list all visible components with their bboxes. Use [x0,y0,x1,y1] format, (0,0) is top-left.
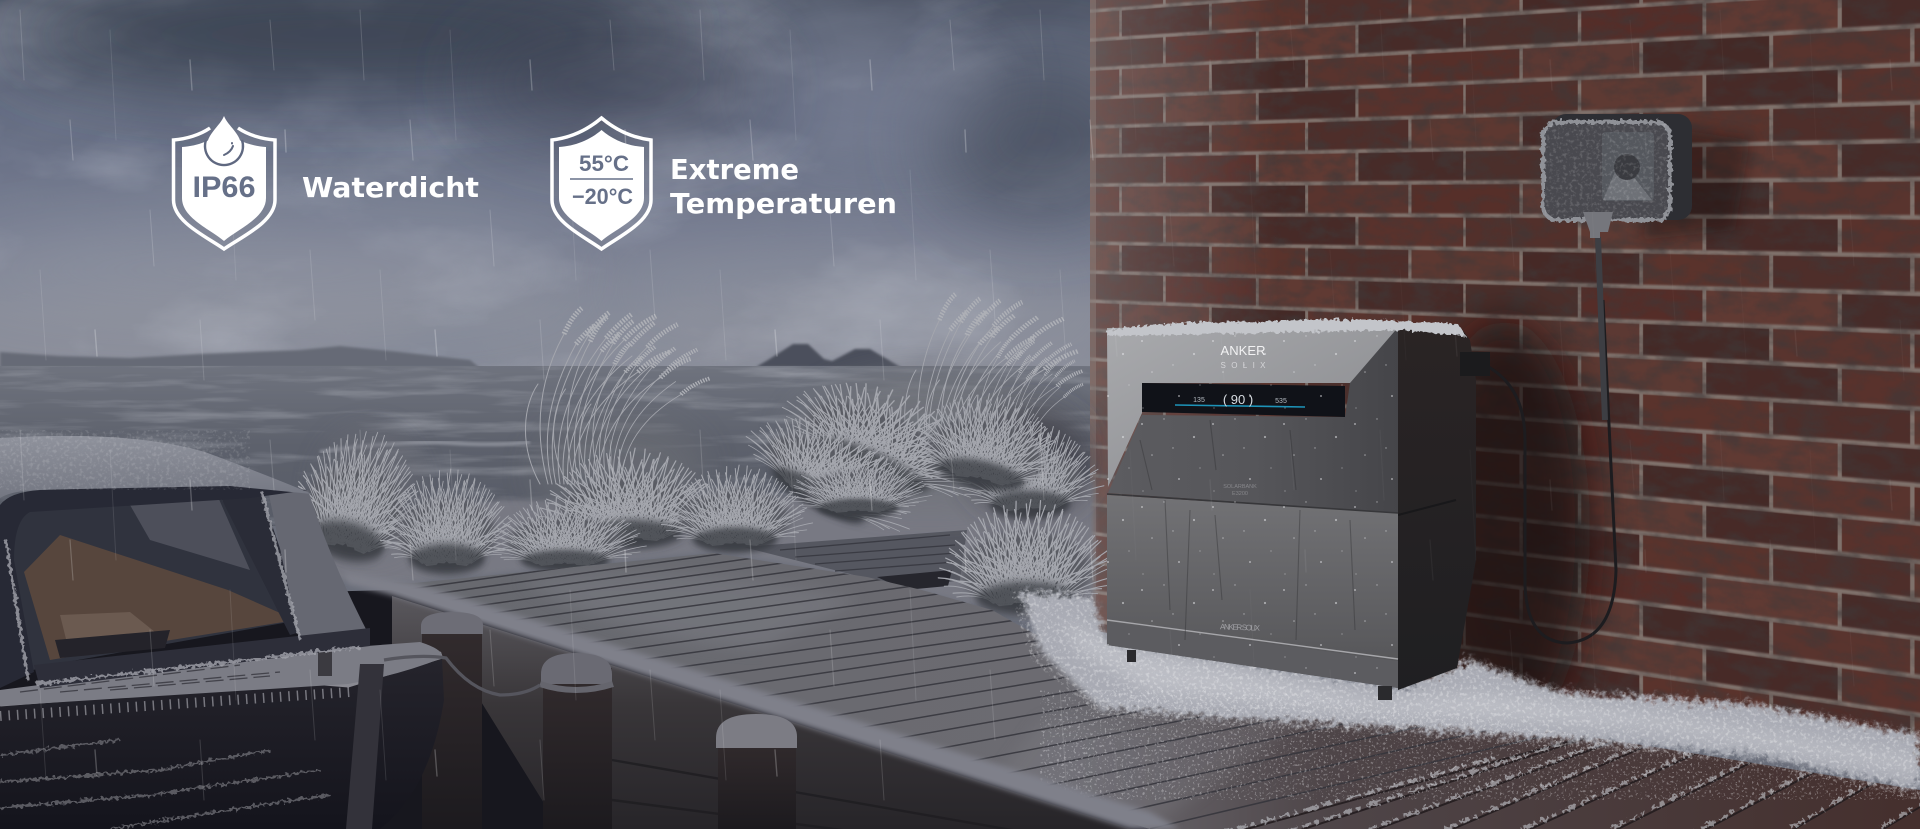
shield icon: temperature range [552,118,651,249]
outdoor socket [1543,114,1692,238]
sea [0,366,1100,526]
unit light chevron [1107,325,1400,487]
battery unit [1106,319,1490,700]
cable gland [1583,212,1613,238]
cabin roof with frost [0,436,312,498]
feature: extreme temperatures [552,118,897,249]
tall plumes, right group [905,294,1083,470]
dock posts [421,612,797,829]
product label: E3200 [1232,491,1248,497]
product label: SOLARBANK [1223,484,1257,490]
display panel [1142,383,1345,417]
frosted beach grass [274,294,1123,616]
socket dial [1614,154,1640,180]
bow post [346,664,384,829]
feet [1127,650,1392,700]
display panel: ( 90 ) [1223,392,1253,407]
grass tufts [274,345,1123,616]
anker solix logo [1220,343,1266,370]
unit lower front panel [1107,495,1398,688]
unit side [1398,324,1476,690]
cable from socket [1598,237,1605,420]
snowy ground behind the deck [300,480,1094,640]
anker solix logo: SOLIX [1220,361,1266,370]
water drops and streaks [1107,325,1398,688]
label: extreme temperatures [670,153,897,220]
socket shadow, cable and plug [1476,114,1692,643]
product label [1223,484,1257,497]
post 2 [540,653,613,829]
mooring cleat [318,646,332,676]
plank gaps [420,554,1538,829]
cable to the unit [1476,300,1616,643]
deck frost edge [344,572,1180,829]
snow on top [1106,319,1466,336]
seam [1107,494,1398,513]
cabin interior wood [24,535,296,660]
boat foredeck [0,642,442,706]
wall shading and frost [1090,0,1750,740]
boat hull [0,658,444,829]
grass haze mass [325,375,1090,545]
anker solix logo: ANKER [1220,343,1266,358]
shield icon: temperature range: 55°C [579,151,629,176]
gunwale with icicles [0,655,442,703]
feature: waterproof [174,116,479,249]
mooring rope [384,656,540,695]
label: waterproof: Waterdicht [302,171,479,204]
unit upper front panel [1108,325,1398,513]
shield icon: temperature range: −20°C [572,184,633,209]
post 3 [716,714,797,829]
label: extreme temperatures: Temperaturen [670,187,897,220]
hull frost streaks [0,740,330,829]
shield icon: IP66 with water drop [174,116,275,249]
distant coast [0,346,480,368]
display panel: 535 [1275,398,1287,405]
dock front face [392,596,1150,829]
shield icon: IP66 with water drop: IP66 [192,171,256,204]
frost on frame edges [6,492,360,684]
water under the dock [0,590,1150,829]
boat [0,430,444,829]
display panel: 135 [1193,397,1205,404]
post 1 [421,612,483,829]
unit plug [1460,352,1490,376]
plank gaps with snow, right part [1244,736,1920,829]
window pillar [218,490,308,635]
snow drift around the unit [1000,585,1920,810]
distant islands [756,344,902,368]
cabin frame [0,484,308,688]
brick wall in perspective [1090,0,1920,766]
base logo: ANKER SOLIX [1220,622,1261,633]
wooden deck [416,554,1920,829]
socket window [1602,132,1654,201]
base trim line [1107,620,1398,659]
label: extreme temperatures: Extreme [670,153,799,186]
sky [0,0,1150,370]
cabin glass highlight [130,497,250,570]
cabin window [0,494,300,680]
back deck section [743,530,967,590]
windscreen frost panel [268,490,370,645]
tall plumes, left group [525,308,710,484]
